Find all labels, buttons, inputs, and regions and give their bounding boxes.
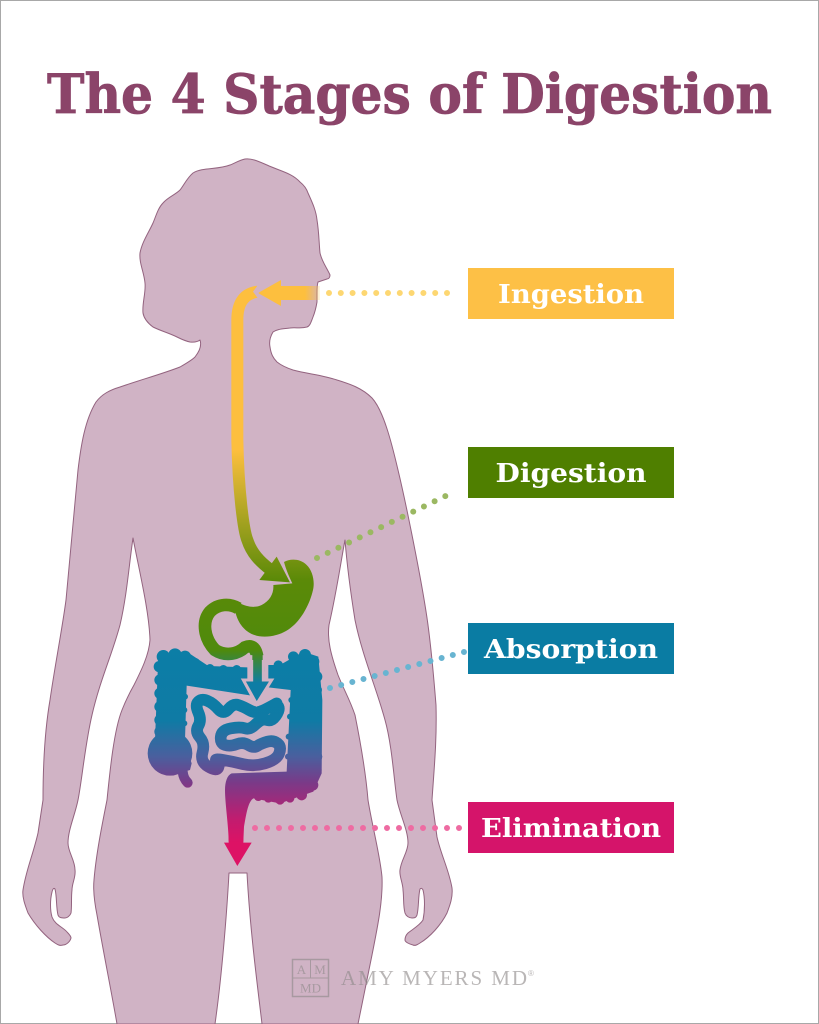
label: ingestion [468,268,674,319]
small intestine [197,700,280,769]
arrow: into intestines [243,657,272,704]
label: elimination: Elimination [481,814,661,844]
stomach [232,560,314,637]
duodenum tube [205,605,258,672]
label: digestion: Digestion [496,459,647,489]
registered mark: ® [528,969,534,978]
logo mark: M [314,962,326,977]
dotted connector: digestion [317,491,456,558]
label: ingestion: Ingestion [498,280,644,310]
arrow: elimination [224,827,252,866]
logo mark: MD [300,980,321,996]
dotted connector: elimination [255,825,461,831]
label: absorption [468,623,674,674]
label: absorption: Absorption [483,635,658,665]
logo mark [292,960,329,996]
esophagus arrow [237,284,290,582]
logo mark: A [297,962,307,977]
title: The 4 Stages of Digestion [47,62,772,126]
dotted connector: absorption [330,652,464,688]
body silhouette [23,159,452,1024]
logo wordmark: AMY MYERS MD [341,966,527,990]
label: elimination [468,802,674,853]
logo: Amy Myers MD [292,960,534,996]
label: digestion [468,447,674,498]
arrow: mouth to throat [258,280,320,306]
digestive tract [148,284,322,866]
appendix [183,772,188,783]
dotted connector: ingestion [329,290,455,296]
large intestine [148,648,322,842]
